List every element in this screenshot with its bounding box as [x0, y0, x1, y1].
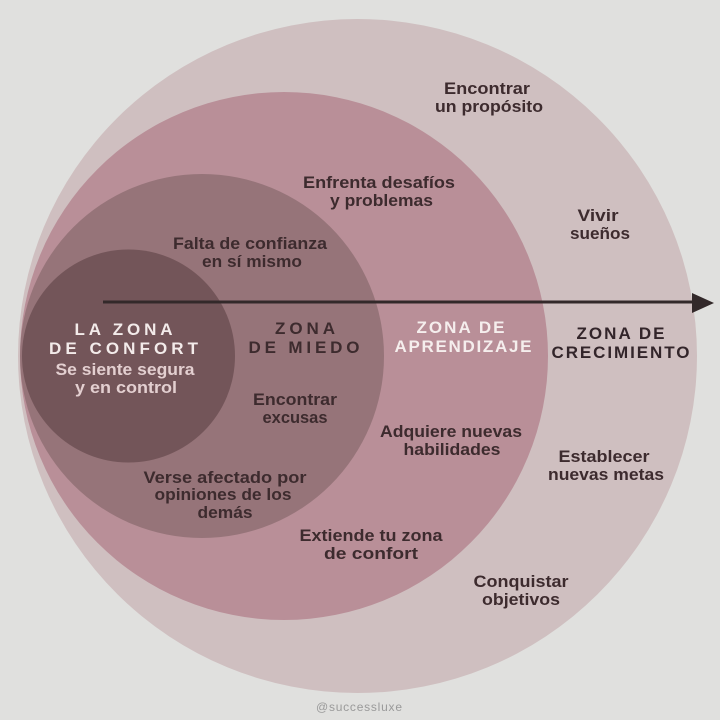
text: fear zone items: opiniones de los [154, 486, 292, 504]
text: growth zone items: Vivir [578, 207, 619, 225]
circle: fear zone [20, 174, 384, 538]
text: learning zone items: Adquiere nuevas [380, 423, 522, 441]
text: growth zone items: nuevas metas [548, 466, 664, 484]
heading: fear zone: DE MIEDO [248, 338, 360, 357]
text: growth zone items [435, 80, 664, 609]
text: fear zone items: Verse afectado por [144, 469, 307, 487]
heading: learning zone [394, 318, 532, 356]
text: comfort zone description [56, 361, 195, 397]
heading: comfort zone: LA ZONA [74, 320, 172, 339]
arrow [103, 293, 714, 313]
text: growth zone items: Encontrar [444, 80, 531, 98]
text: learning zone items: y problemas [330, 192, 433, 210]
heading: comfort zone: DE CONFORT [49, 339, 199, 358]
heading: learning zone: APRENDIZAJE [394, 337, 532, 356]
watermark: @successluxe [316, 700, 402, 714]
heading: learning zone: ZONA DE [416, 318, 504, 337]
heading: growth zone: ZONA DE [576, 324, 664, 343]
text: fear zone items: en sí mismo [202, 253, 302, 271]
text: learning zone items: de confort [324, 545, 419, 563]
text: growth zone items: sueños [570, 225, 630, 243]
heading: comfort zone [49, 320, 199, 358]
heading: growth zone [552, 324, 690, 362]
heading: fear zone [248, 319, 360, 357]
text: growth zone items: Conquistar [474, 573, 569, 591]
circle: learning zone [20, 92, 548, 620]
text: fear zone items: Falta de confianza [173, 235, 328, 253]
text: learning zone items: Extiende tu zona [300, 527, 443, 545]
text: comfort zone description: y en control [75, 379, 177, 397]
text: learning zone items: habilidades [404, 441, 500, 459]
text: fear zone items [144, 235, 338, 522]
heading: fear zone: ZONA [275, 319, 335, 338]
circle: comfort zone [22, 250, 235, 462]
text: fear zone items: demás [198, 504, 252, 522]
text: comfort zone description: Se siente segura [56, 361, 195, 379]
heading: growth zone: CRECIMIENTO [552, 343, 690, 362]
text: learning zone items: Enfrenta desafíos [303, 174, 455, 192]
text: growth zone items: Establecer [558, 448, 650, 466]
text: fear zone items: excusas [262, 409, 328, 427]
text: fear zone items: Encontrar [253, 391, 338, 409]
text: growth zone items: objetivos [482, 591, 560, 609]
text: growth zone items: un propósito [435, 98, 543, 116]
text: learning zone items [300, 174, 522, 563]
